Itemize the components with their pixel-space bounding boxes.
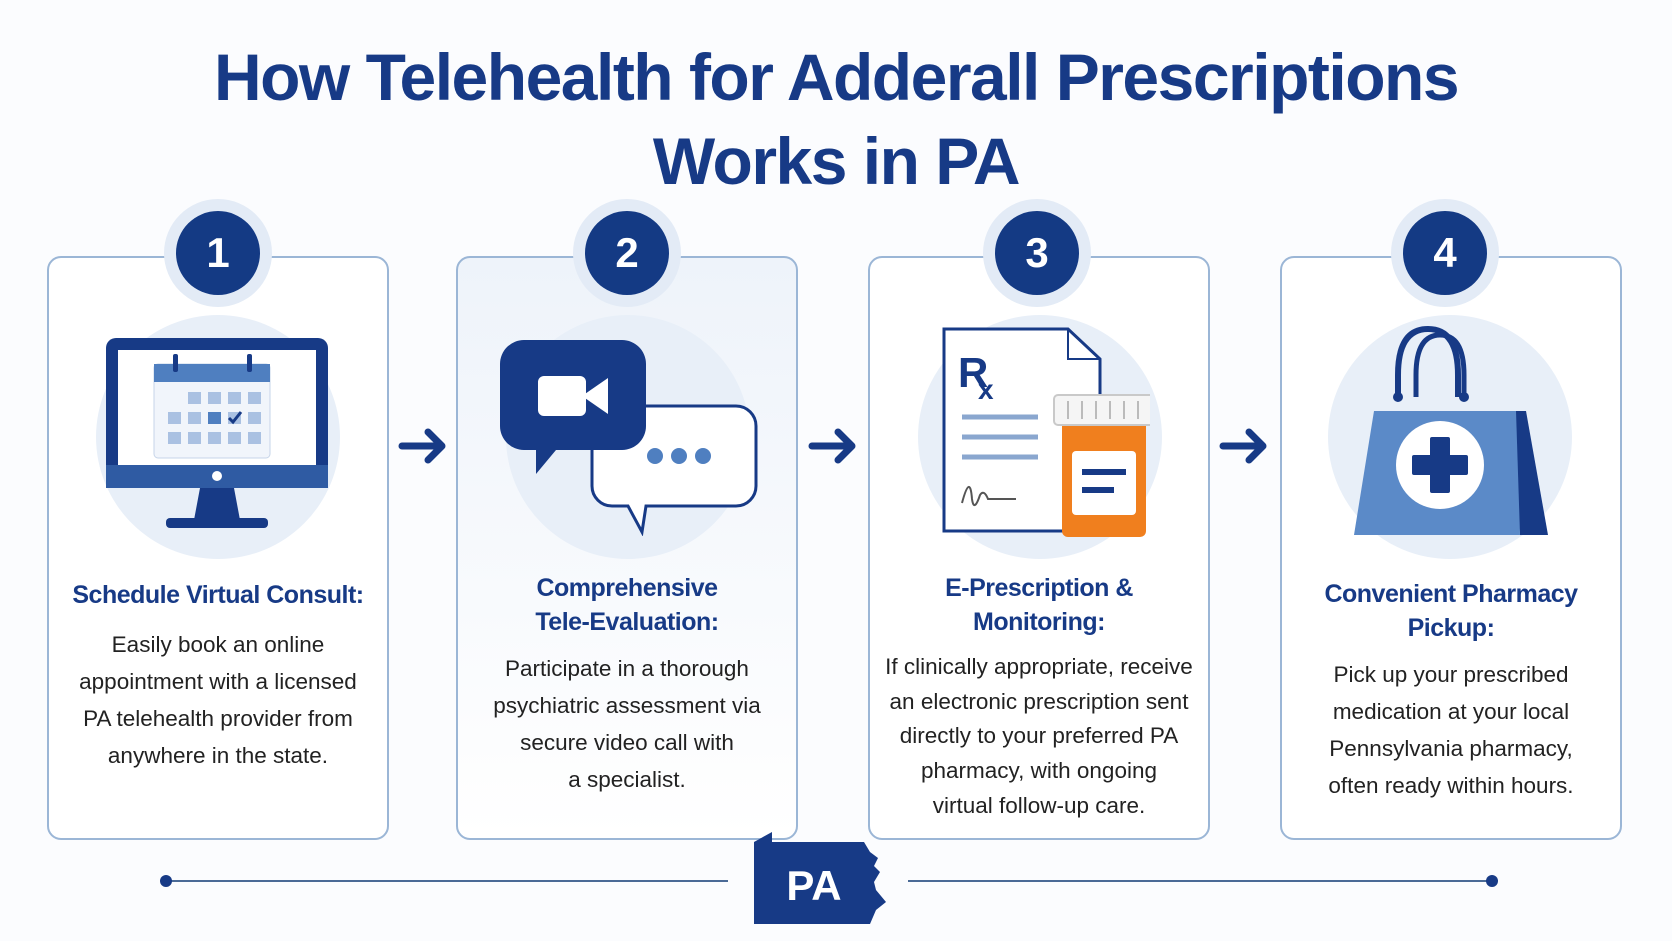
- icon: prescription and pill bottle: [942, 328, 1150, 537]
- arrow 2: [808, 428, 856, 464]
- icon halo 1: [96, 315, 340, 559]
- number 2: [585, 211, 669, 295]
- text: step 4: medication at your local: [1333, 699, 1569, 724]
- number 4: 4: [1433, 229, 1457, 276]
- text: step 3: directly to your preferred PA: [900, 723, 1178, 748]
- number 3: [995, 211, 1079, 295]
- panel: step 1: [47, 256, 389, 840]
- text: step 3: [885, 574, 1193, 818]
- title: How Telehealth for Adderall Prescriptions: [214, 40, 1458, 114]
- text: step 4: Convenient Pharmacy: [1324, 580, 1578, 608]
- text: step 2: Participate in a thorough: [505, 656, 749, 681]
- icon: prescription and pill bottle: R: [958, 349, 988, 396]
- arrow 1: [398, 428, 446, 464]
- text: step 2: [493, 574, 761, 792]
- text: step 2: Comprehensive: [536, 574, 718, 602]
- panel: step 2: [456, 256, 798, 840]
- icon: video chat: [500, 340, 758, 536]
- PA state badge: PA: [786, 862, 842, 909]
- icon: monitor calendar: [106, 338, 328, 528]
- text: step 4: [1324, 580, 1578, 798]
- text: step 2: Tele-Evaluation:: [535, 608, 719, 636]
- icon halo 3: [918, 315, 1162, 559]
- title: [214, 40, 1458, 198]
- number 2: 2: [615, 229, 639, 276]
- text: step 1: Schedule Virtual Consult:: [72, 581, 364, 609]
- text: step 3: virtual follow-up care.: [933, 793, 1145, 818]
- text: step 2: psychiatric assessment via: [493, 693, 761, 718]
- icon: prescription and pill bottle: x: [978, 374, 994, 405]
- number 3: 3: [1025, 229, 1049, 276]
- text: step 1: Easily book an online: [112, 632, 324, 657]
- text: step 1: [72, 581, 364, 768]
- text: step 2: secure video call with: [520, 730, 734, 755]
- number 1: [176, 211, 260, 295]
- arrow 3: [1220, 428, 1266, 464]
- panel: step 3: [868, 256, 1210, 840]
- icon halo 4: [1328, 315, 1572, 559]
- text: step 1: anywhere in the state.: [108, 743, 328, 768]
- text: step 2: a specialist.: [568, 767, 686, 792]
- icon halo 2: [506, 315, 750, 559]
- text: step 4: Pennsylvania pharmacy,: [1329, 736, 1573, 761]
- bottom timeline: [160, 875, 1498, 887]
- text: step 3: an electronic prescription sent: [890, 689, 1188, 714]
- icon: pharmacy bag: [1354, 326, 1548, 535]
- number 1: 1: [206, 229, 230, 276]
- panel: step 4: [1280, 256, 1622, 840]
- text: step 3: Monitoring:: [973, 608, 1105, 636]
- text: step 4: often ready within hours.: [1328, 773, 1574, 798]
- title: Works in PA: [653, 124, 1019, 198]
- text: step 3: E-Prescription &: [945, 574, 1133, 602]
- text: step 1: appointment with a licensed: [79, 669, 357, 694]
- text: step 4: Pick up your prescribed: [1333, 662, 1569, 687]
- number 4: [1403, 211, 1487, 295]
- text: step 4: Pickup:: [1408, 614, 1494, 642]
- text: step 3: pharmacy, with ongoing: [921, 758, 1157, 783]
- text: step 1: PA telehealth provider from: [83, 706, 353, 731]
- text: step 3: If clinically appropriate, receive: [885, 654, 1193, 679]
- PA state badge: [754, 832, 886, 924]
